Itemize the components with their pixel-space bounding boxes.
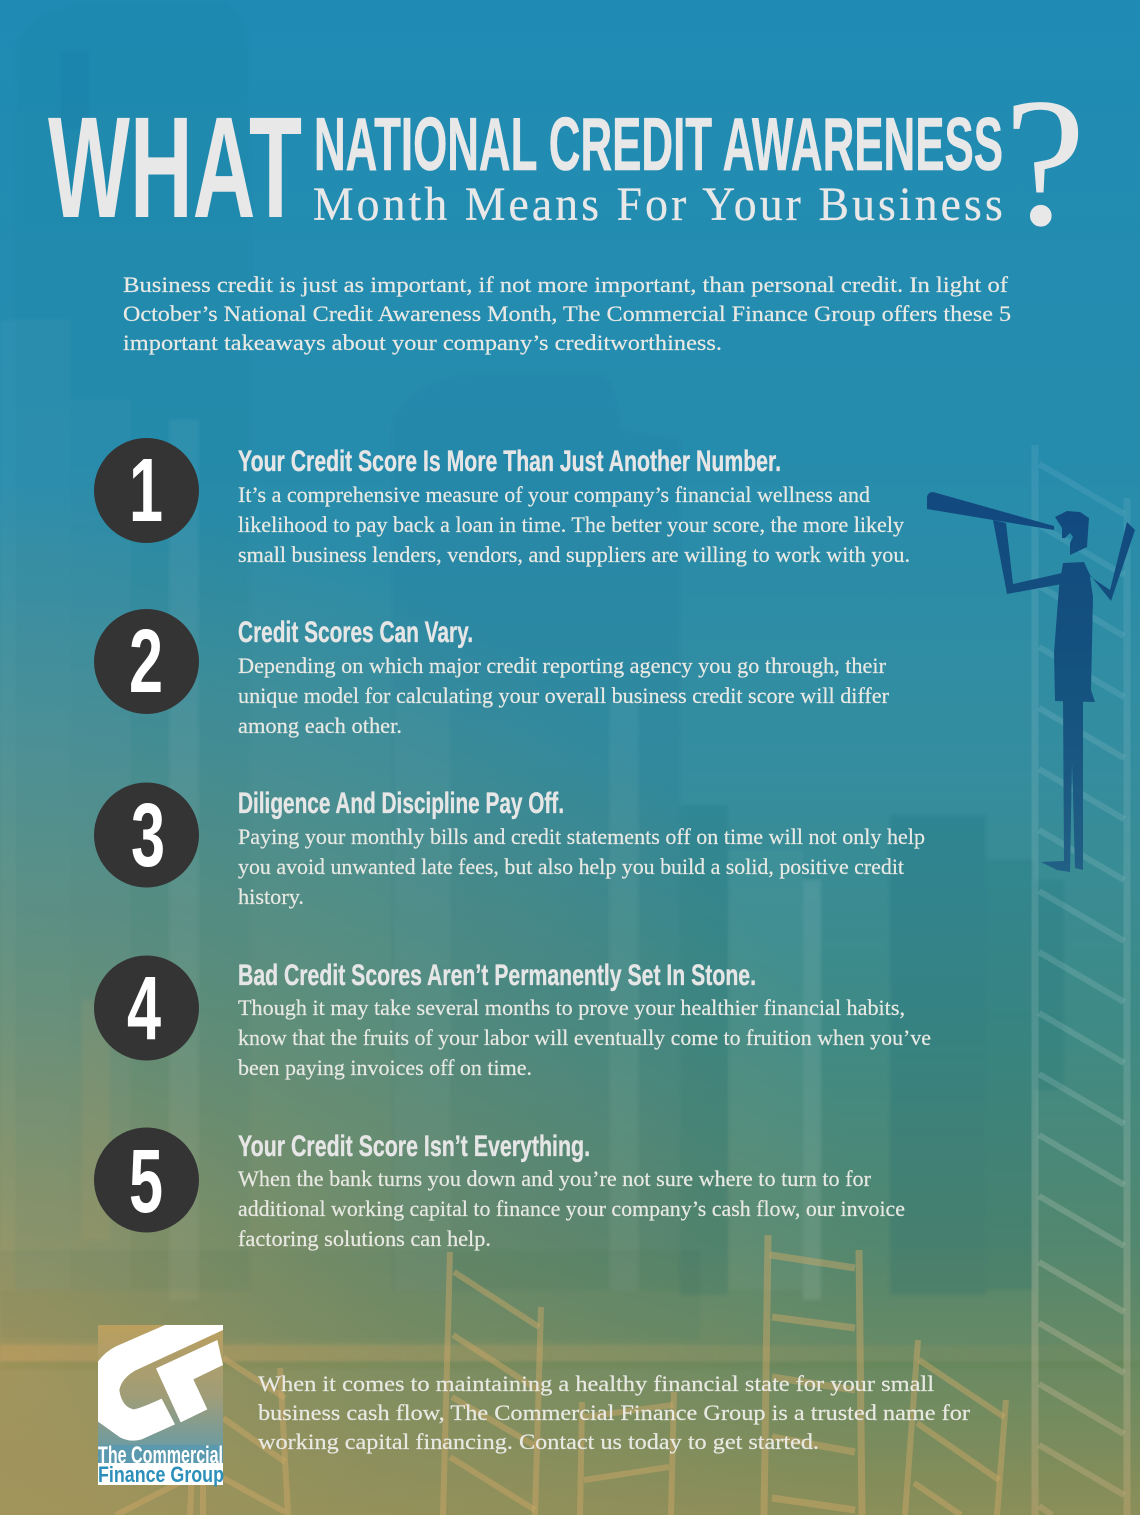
- number badge 3: [94, 782, 199, 888]
- logo mark: CF: [98, 1325, 223, 1441]
- title: [48, 60, 1086, 264]
- number badge 4: [94, 956, 199, 1060]
- closing paragraph: [258, 1371, 971, 1454]
- body 5: When the bank turns you down and you’re not sure where to turn to for: [238, 1166, 872, 1191]
- number badge 3: 3: [131, 785, 165, 886]
- body 3: Paying your monthly bills and credit statements off on time will not only help: [238, 824, 925, 849]
- body 5: additional working capital to finance your company’s cash flow, our invoice: [238, 1196, 905, 1221]
- ladder B: [580, 1392, 674, 1515]
- intro paragraph: October’s National Credit Awareness Month, The Commercial Finance Group offers these 5: [123, 301, 1011, 326]
- number badge 2: 2: [129, 611, 163, 712]
- closing paragraph: working capital financing. Contact us today to get started.: [258, 1429, 819, 1454]
- question mark: ?: [1004, 60, 1086, 264]
- body 2: Depending on which major credit reporting agency you go through, their: [238, 653, 887, 678]
- ladder E: [116, 1358, 288, 1515]
- body 4: [238, 995, 931, 1080]
- heading 1: Your Credit Score Is More Than Just Another Number.: [238, 445, 781, 478]
- body 2: among each other.: [238, 713, 402, 738]
- body 5: factoring solutions can help.: [238, 1226, 491, 1251]
- body 4: Though it may take several months to prove your healthier financial habits,: [238, 995, 905, 1020]
- heading 2: Credit Scores Can Vary.: [238, 616, 473, 649]
- ladders: foreground bottom: [116, 1235, 1006, 1515]
- body 5: [238, 1166, 905, 1251]
- logo text line 2: Finance Group: [98, 1462, 224, 1487]
- ladder C: [764, 1235, 862, 1515]
- right arm: [1084, 522, 1135, 601]
- horizon band: [0, 1345, 1140, 1369]
- left arm: [993, 520, 1062, 594]
- number badge 4: 4: [127, 958, 161, 1059]
- body 2: unique model for calculating your overall business credit score will differ: [238, 683, 890, 708]
- body 1: likelihood to pay back a loan in time. The better your score, the more likely: [238, 512, 904, 537]
- logo text line 1: The Commercial: [98, 1442, 223, 1469]
- heading 4: Bad Credit Scores Aren’t Permanently Set In Stone.: [238, 959, 756, 992]
- ladder: tall right: [1035, 445, 1127, 1515]
- body 1: It’s a comprehensive measure of your company’s financial wellness and: [238, 482, 870, 507]
- body 3: history.: [238, 884, 304, 909]
- intro paragraph: Business credit is just as important, if not more important, than personal credit. In light of: [123, 272, 1009, 297]
- number badge 2: [94, 609, 199, 714]
- number badge 5: [94, 1128, 199, 1232]
- item 5: [94, 1128, 905, 1251]
- logo: The Commercial Finance Group: [98, 1325, 224, 1487]
- number badge 1: 1: [129, 440, 163, 541]
- title word: WHAT: WHAT: [48, 87, 302, 248]
- closing paragraph: When it comes to maintaining a healthy financial state for your small: [258, 1371, 934, 1396]
- body 4: know that the fruits of your labor will eventually come to fruition when you’ve: [238, 1025, 931, 1050]
- title line: Month Means For Your Business: Month Means For Your Business: [313, 178, 1003, 231]
- intro paragraph: important takeaways about your company’s creditworthiness.: [123, 330, 722, 355]
- ladders: [1035, 445, 1127, 1515]
- body 4: been paying invoices off on time.: [238, 1055, 532, 1080]
- body 2: [238, 653, 890, 738]
- heading 3: Diligence And Discipline Pay Off.: [238, 787, 564, 820]
- body 3: you avoid unwanted late fees, but also help you build a solid, positive credit: [238, 854, 904, 879]
- item 4: [94, 956, 931, 1080]
- legs and shoes: [1041, 700, 1083, 872]
- item 2: [94, 609, 890, 738]
- closing paragraph: business cash flow, The Commercial Finance Group is a trusted name for: [258, 1400, 971, 1425]
- ladder A: [443, 1252, 541, 1515]
- torso: [1054, 562, 1095, 702]
- body 3: [238, 824, 925, 909]
- figure: man with telescope: [927, 492, 1135, 872]
- body 1: small business lenders, vendors, and suppliers are willing to work with you.: [238, 542, 910, 567]
- head: [1055, 511, 1089, 555]
- item 1: [94, 438, 910, 567]
- heading 5: Your Credit Score Isn’t Everything.: [238, 1130, 590, 1163]
- ladder D: [905, 1340, 1006, 1515]
- number badge 5: 5: [129, 1131, 163, 1232]
- number badge 1: [94, 438, 199, 543]
- body 1: [238, 482, 910, 567]
- intro paragraph: [123, 272, 1011, 355]
- item 3: [94, 782, 925, 909]
- telescope: [927, 492, 1054, 530]
